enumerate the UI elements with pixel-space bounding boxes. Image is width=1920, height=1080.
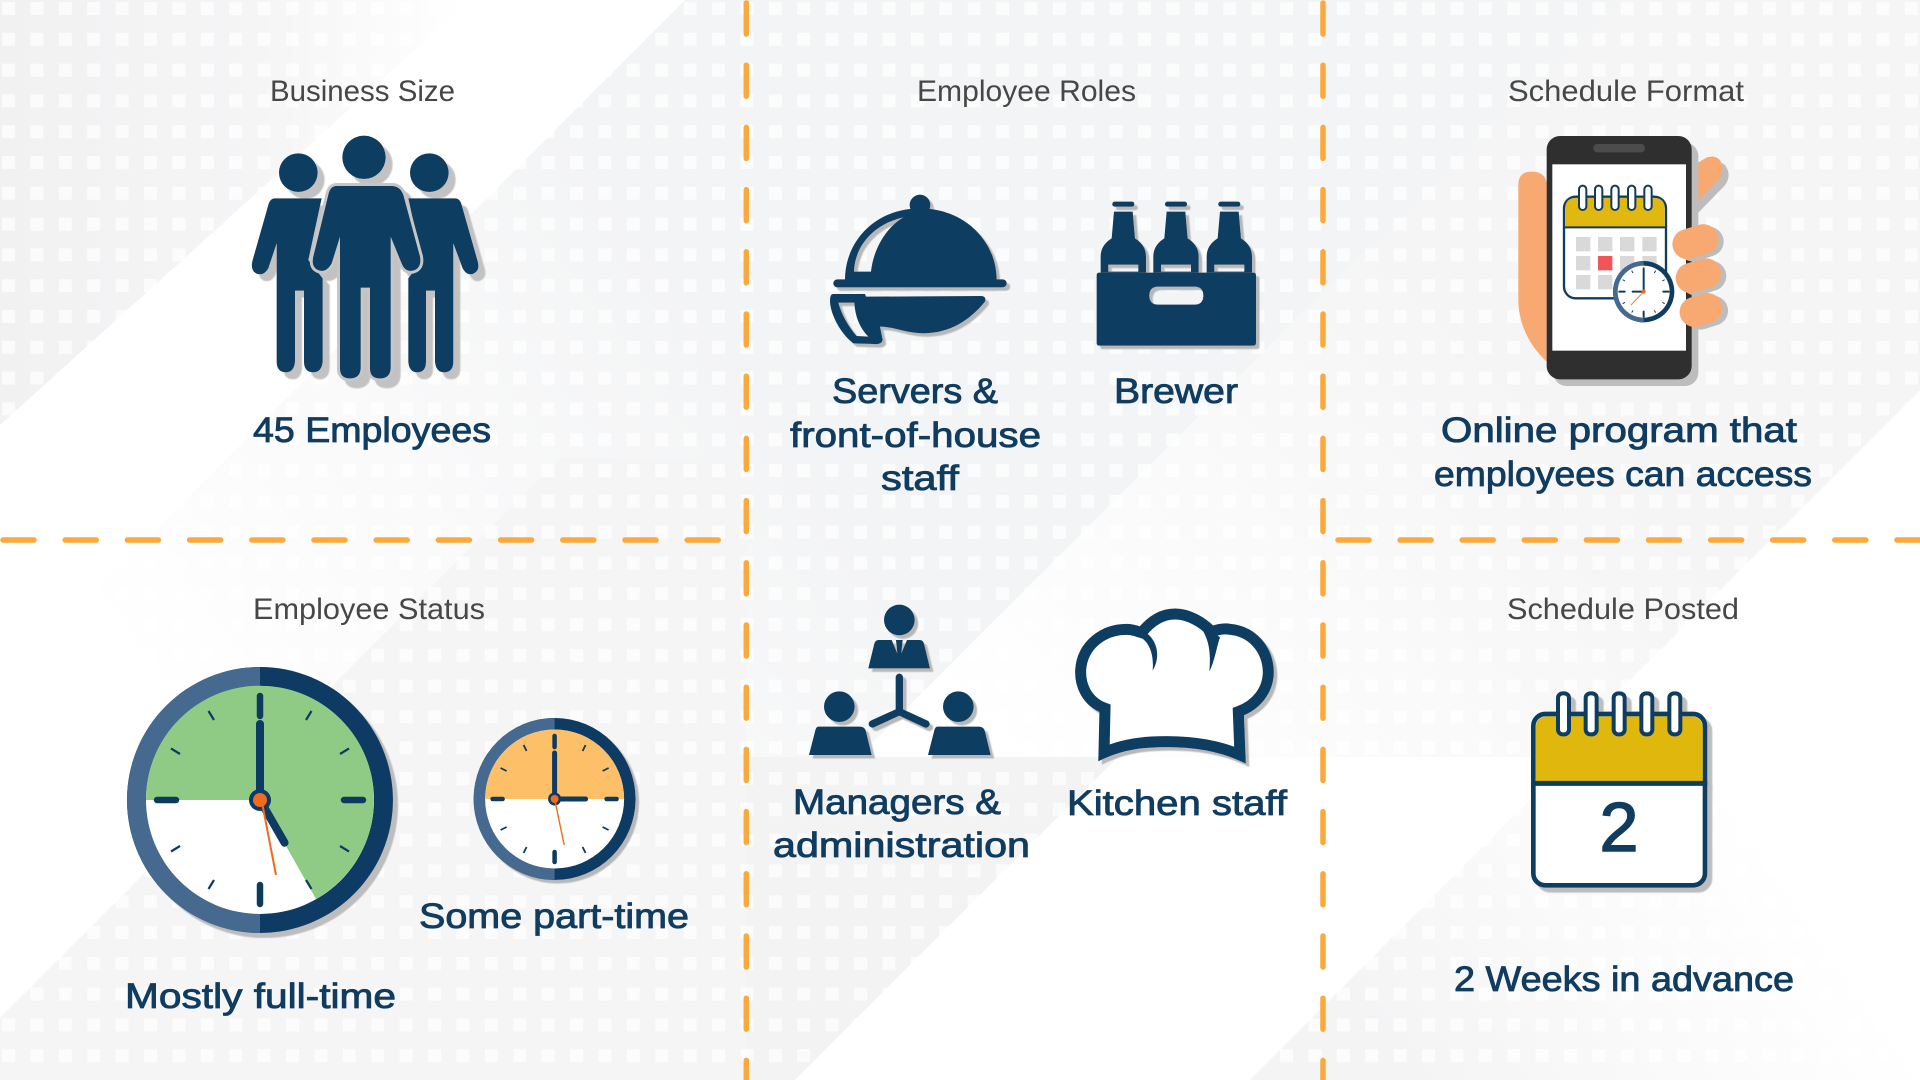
icon: server cloche with hand	[830, 195, 1007, 344]
label: managers and administration: Managers &	[793, 783, 1001, 822]
calendar number: 2	[1600, 788, 1638, 866]
label: servers and front-of-house staff: staff	[881, 459, 959, 498]
heading: business size: Business Size	[270, 75, 455, 108]
value: online program: Online program that	[1441, 411, 1797, 450]
divider: horizontal dashed line left	[3, 537, 720, 543]
panel: schedule format	[1434, 75, 1812, 494]
icon: large clock full-time	[127, 667, 393, 933]
panel: business size	[252, 75, 491, 450]
label: mostly full-time: Mostly full-time	[125, 977, 396, 1016]
icon: three people	[252, 136, 478, 378]
heading: employee roles: Employee Roles	[917, 75, 1136, 108]
label: servers and front-of-house staff: Servers &	[832, 372, 998, 411]
icon: crate of bottles	[1097, 202, 1256, 346]
panel: employee roles top	[790, 75, 1256, 498]
label: servers and front-of-house staff	[790, 372, 1041, 498]
heading: schedule format: Schedule Format	[1508, 75, 1744, 108]
icon: hand holding phone with calendar	[1518, 136, 1732, 386]
value: online program: employees can access	[1434, 455, 1812, 494]
heading: employee status: Employee Status	[253, 593, 485, 626]
panel: schedule posted	[1454, 593, 1794, 999]
icon: small clock part-time	[474, 718, 636, 880]
value: online program	[1434, 411, 1812, 494]
label: brewer: Brewer	[1114, 372, 1238, 411]
panel: employee status	[125, 593, 689, 1016]
icon: calendar with number 2	[1531, 693, 1707, 885]
divider: vertical dashed line left	[744, 3, 749, 1080]
divider: horizontal dashed line right	[1338, 537, 1920, 543]
label: managers and administration: administration	[773, 826, 1030, 865]
value: two weeks in advance: 2 Weeks in advance	[1454, 960, 1794, 999]
divider: vertical dashed line right	[1320, 3, 1326, 1080]
panel: employee roles bottom	[773, 605, 1287, 865]
label: kitchen staff: Kitchen staff	[1067, 784, 1287, 823]
label: managers and administration	[773, 783, 1030, 865]
value: 45 employees: 45 Employees	[253, 411, 491, 450]
label: servers and front-of-house staff: front-of-house	[790, 416, 1041, 455]
label: some part-time: Some part-time	[419, 897, 689, 936]
icon: manager hierarchy	[809, 605, 991, 755]
heading: schedule posted: Schedule Posted	[1507, 593, 1739, 626]
icon: chef hat	[1081, 614, 1268, 755]
